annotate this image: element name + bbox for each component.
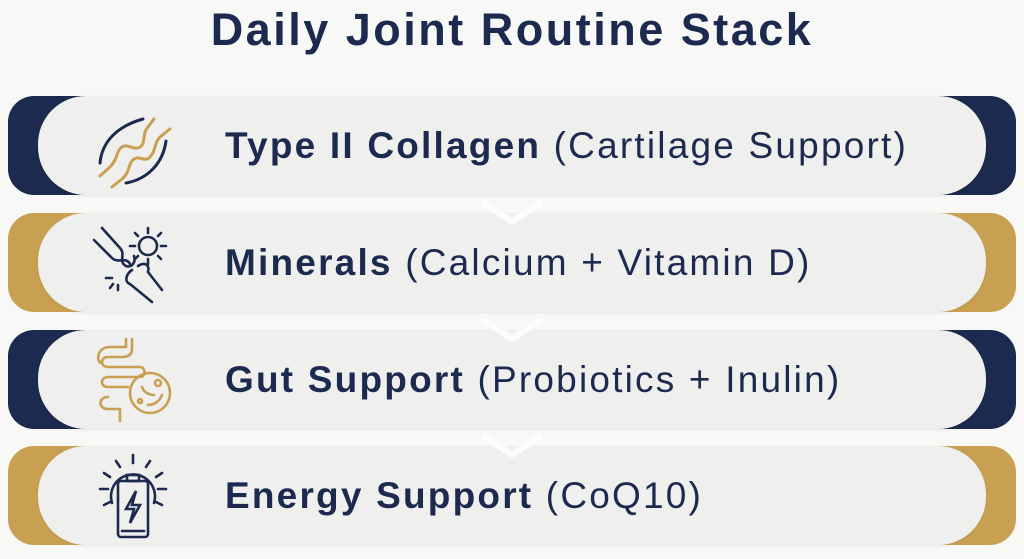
label: Energy Support (CoQ10) bbox=[225, 475, 703, 516]
icon: joint bbox=[98, 117, 172, 189]
icon: battery with glow bbox=[98, 454, 168, 538]
chevron arrow 3 bbox=[493, 446, 531, 457]
row 4: Energy Support bbox=[8, 446, 1016, 545]
title: Daily Joint Routine Stack bbox=[211, 4, 813, 55]
row 2: Minerals bbox=[8, 213, 1016, 312]
label: Minerals (Calcium + Vitamin D) bbox=[225, 242, 812, 283]
row 3: Gut Support bbox=[8, 330, 1016, 429]
label: Type II Collagen (Cartilage Support) bbox=[225, 125, 908, 166]
row 1: Type II Collagen bbox=[8, 96, 1016, 195]
icon: bone with sun bbox=[92, 226, 168, 304]
icon: gut with microbe bbox=[96, 338, 172, 422]
chevron arrow 2 bbox=[493, 330, 531, 341]
label: Gut Support (Probiotics + Inulin) bbox=[225, 359, 841, 400]
chevron arrow 1 bbox=[493, 212, 531, 224]
